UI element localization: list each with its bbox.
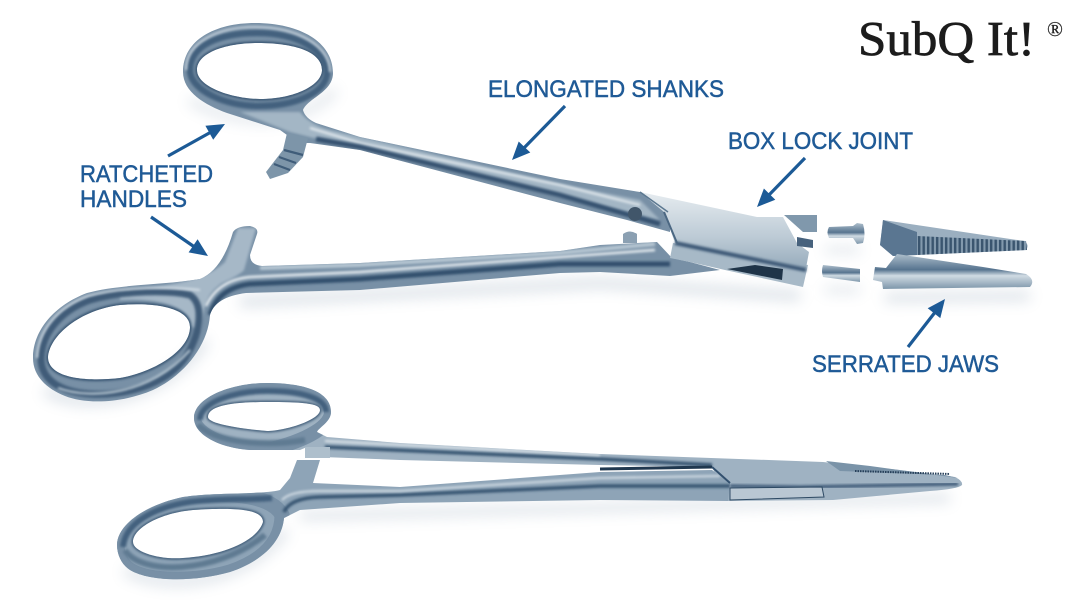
exploded pin, upper — [828, 223, 864, 244]
arrow: ratcheted handles upper — [168, 124, 225, 156]
lower jaw — [873, 254, 1032, 289]
lower arm — [117, 460, 730, 580]
instrument: large exploded needle holder — [30, 20, 817, 410]
label: ratcheted handles — [80, 161, 213, 213]
arrow: elongated shanks — [512, 106, 565, 160]
slot in box — [727, 265, 783, 280]
arm highlights — [730, 484, 958, 487]
label: box lock joint: BOX LOCK JOINT — [728, 128, 913, 155]
upper serrated jaw — [880, 220, 1028, 256]
lower handle with ring — [30, 220, 730, 410]
label: ratcheted handles: RATCHETED — [80, 161, 213, 188]
upper arm — [190, 380, 970, 505]
box lock body — [640, 192, 809, 287]
box lock prong — [784, 215, 817, 248]
slide pin on lower handle — [623, 232, 637, 243]
label: serrated jaws: SERRATED JAWS — [812, 351, 999, 378]
upper handle with ring — [180, 20, 680, 240]
logo: SubQ It! — [858, 11, 1035, 66]
serrated tip — [826, 461, 958, 478]
arrow: serrated jaws — [908, 299, 945, 347]
instrument: assembled needle holder — [110, 380, 970, 585]
soft shadows — [45, 90, 1030, 582]
ratchet teeth, upper handle — [266, 133, 308, 179]
arrow: ratcheted handles lower — [151, 217, 208, 256]
logo: ® — [1047, 17, 1063, 41]
arrow: box lock joint — [757, 158, 805, 207]
pivot hole — [628, 207, 642, 221]
label: ratcheted handles: HANDLES — [80, 186, 187, 213]
exploded pin, lower — [822, 265, 860, 282]
ratchet box — [305, 447, 330, 458]
label: elongated shanks: ELONGATED SHANKS — [488, 76, 724, 103]
